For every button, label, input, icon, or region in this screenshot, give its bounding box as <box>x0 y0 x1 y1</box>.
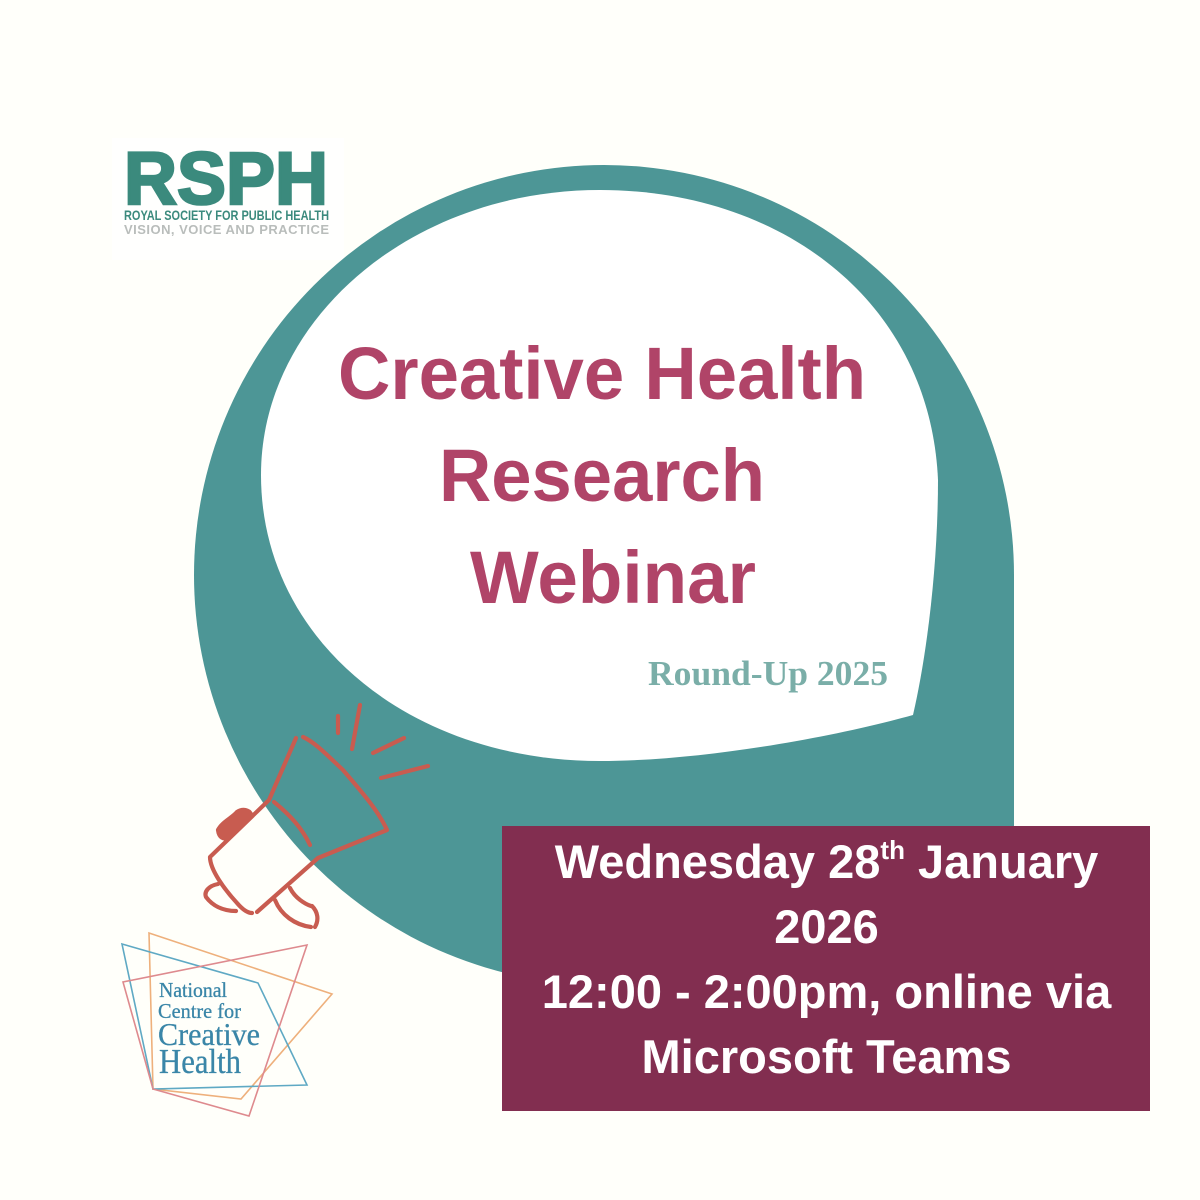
title: Webinar <box>470 536 756 619</box>
date panel <box>502 826 1150 1111</box>
RSPH logo: RSPH <box>124 137 328 220</box>
RSPH logo: ROYAL SOCIETY FOR PUBLIC HEALTH <box>124 207 329 223</box>
subtitle: Round-Up 2025: Round-Up 2025 <box>648 654 888 693</box>
date and time text: Microsoft Teams <box>642 1030 1012 1083</box>
date and time text: Wednesday 28 <box>555 835 880 888</box>
date and time text: 12:00 - 2:00pm, online via <box>542 965 1112 1018</box>
date and time text <box>542 835 1112 1083</box>
National Centre for Creative Health logo: National <box>159 978 227 1002</box>
date and time text: 2026 <box>774 900 879 953</box>
National Centre for Creative Health logo: Creative <box>158 1016 260 1052</box>
title <box>338 332 866 619</box>
speech bubble outer shape <box>194 165 1014 985</box>
speech bubble inner panel <box>261 190 938 761</box>
title: Creative Health <box>338 332 866 415</box>
icon: megaphone <box>206 705 428 927</box>
National Centre for Creative Health logo: Centre for <box>158 999 241 1023</box>
RSPH logo: VISION, VOICE AND PRACTICE <box>124 222 329 237</box>
date and time text: th <box>880 835 905 865</box>
National Centre for Creative Health logo: Health <box>159 1042 241 1081</box>
National Centre for Creative Health logo <box>122 933 332 1116</box>
date and time text: January <box>905 835 1098 888</box>
title: Research <box>439 434 765 517</box>
